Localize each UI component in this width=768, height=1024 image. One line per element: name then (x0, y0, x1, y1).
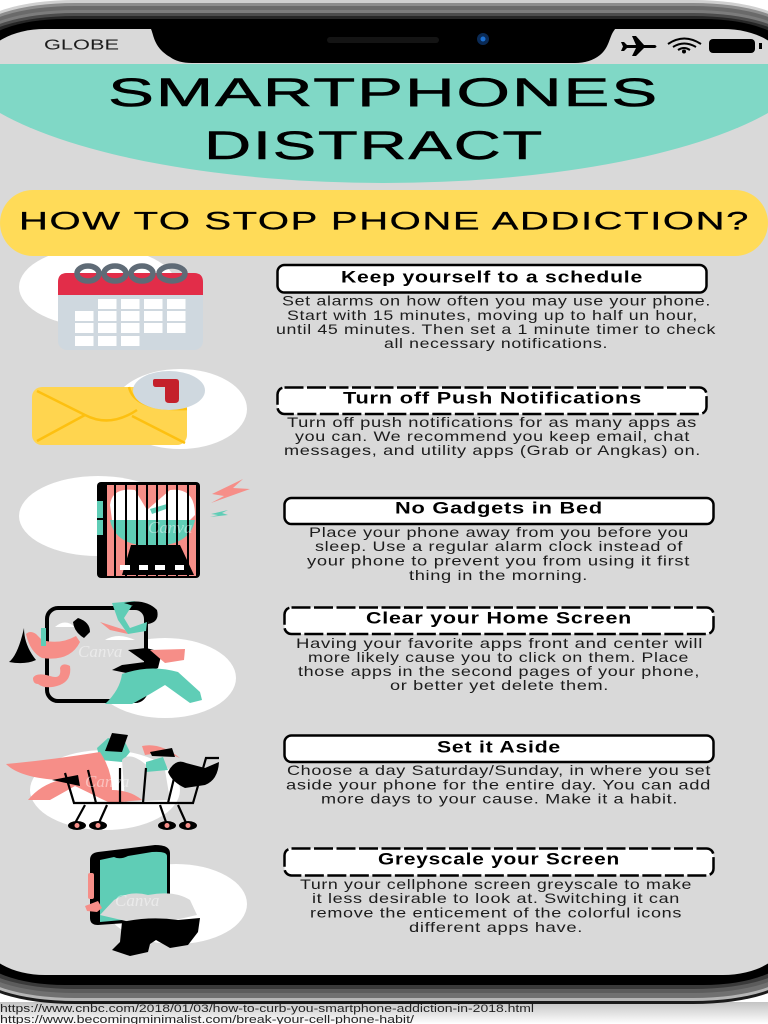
tip 1: schedule (276, 265, 717, 351)
tip 2: push notifications: Turn off push notifications for as many apps as (287, 414, 697, 430)
source links (0, 1003, 534, 1024)
tip 2: push notifications: messages, and utility apps (Grab or Angkas) on. (284, 442, 701, 458)
title banner: DISTRACT (204, 124, 544, 168)
tip 4: clear home screen: Having your favorite apps front and center will (296, 635, 703, 651)
tip 6: greyscale (284, 848, 714, 935)
illustration: phone jail: Canva (148, 518, 192, 537)
illustration: home screen characters: Canva (78, 642, 122, 661)
status icons (621, 36, 762, 56)
illustration: phone hug (85, 845, 247, 956)
tip 5: set it aside: more days to your cause. Make it a habit. (321, 790, 678, 806)
illustration: shopping cart (6, 733, 219, 830)
tip 3: no gadgets in bed: your phone to prevent you from using it first (307, 552, 690, 568)
carrier label: GLOBE (44, 38, 119, 54)
tip 3: no gadgets in bed: thing in the morning. (409, 567, 588, 583)
tip 4: clear home screen: or better yet delete them. (390, 677, 609, 693)
tip 6: greyscale: remove the enticement of the colorful icons (310, 904, 682, 920)
tip 6: greyscale: Greyscale your Screen (378, 850, 620, 868)
tip 1: schedule: all necessary notifications. (384, 335, 608, 351)
tip 4: clear home screen (284, 608, 714, 693)
tip 4: clear home screen: those apps in the second pages of your phone, (298, 663, 700, 679)
illustration: shopping cart: Canva (85, 772, 129, 791)
subtitle pill: HOW TO STOP PHONE ADDICTION? (19, 208, 750, 236)
illustration: envelope (32, 369, 247, 449)
tip 3: no gadgets in bed (284, 498, 714, 583)
title banner: SMARTPHONES (108, 71, 659, 115)
tip 6: greyscale: it less desirable to look at. Switching it can (312, 890, 680, 906)
tip 6: greyscale: Turn your cellphone screen greyscale to make (300, 876, 692, 892)
tip 4: clear home screen: Clear your Home Screen (366, 610, 632, 628)
illustration: home screen characters (9, 601, 236, 718)
tip 5: set it aside: Set it Aside (437, 738, 561, 756)
tip 1: schedule: Start with 15 minutes, moving up to half un hour, (287, 307, 698, 323)
tip 5: set it aside (284, 736, 714, 806)
tip 6: greyscale: different apps have. (409, 919, 583, 935)
tip 2: push notifications (278, 388, 706, 458)
illustration: phone hug: Canva (115, 891, 159, 910)
tip 1: schedule: until 45 minutes. Then set a 1 minute timer to check (276, 321, 717, 337)
tip 4: clear home screen: more likely cause you to click on them. Place (308, 649, 689, 665)
tip 3: no gadgets in bed: Place your phone away from you before you (309, 524, 689, 540)
subtitle pill (0, 190, 768, 256)
tip 2: push notifications: Turn off Push Notifications (343, 390, 642, 408)
shadow under phone (0, 1002, 768, 1024)
illustration: phone jail (19, 476, 250, 578)
illustration: calendar (19, 247, 203, 350)
tip 1: schedule: Keep yourself to a schedule (341, 268, 643, 286)
notch (148, 25, 620, 63)
tip 3: no gadgets in bed: No Gadgets in Bed (395, 500, 603, 518)
tip 2: push notifications: you can. We recommend you keep email, chat (295, 428, 690, 444)
title banner (0, 64, 768, 183)
tip 5: set it aside: Choose a day Saturday/Sunday, in where you set (287, 762, 711, 778)
tip 1: schedule: Set alarms on how often you may use your phone. (282, 292, 711, 308)
source links: https://www.cnbc.com/2018/01/03/how-to-curb-you-smartphone-addiction-in-2018.html (0, 1003, 534, 1015)
tip 3: no gadgets in bed: sleep. Use a regular alarm clock instead of (315, 538, 683, 554)
tip 5: set it aside: aside your phone for the entire day. You can add (286, 776, 711, 792)
